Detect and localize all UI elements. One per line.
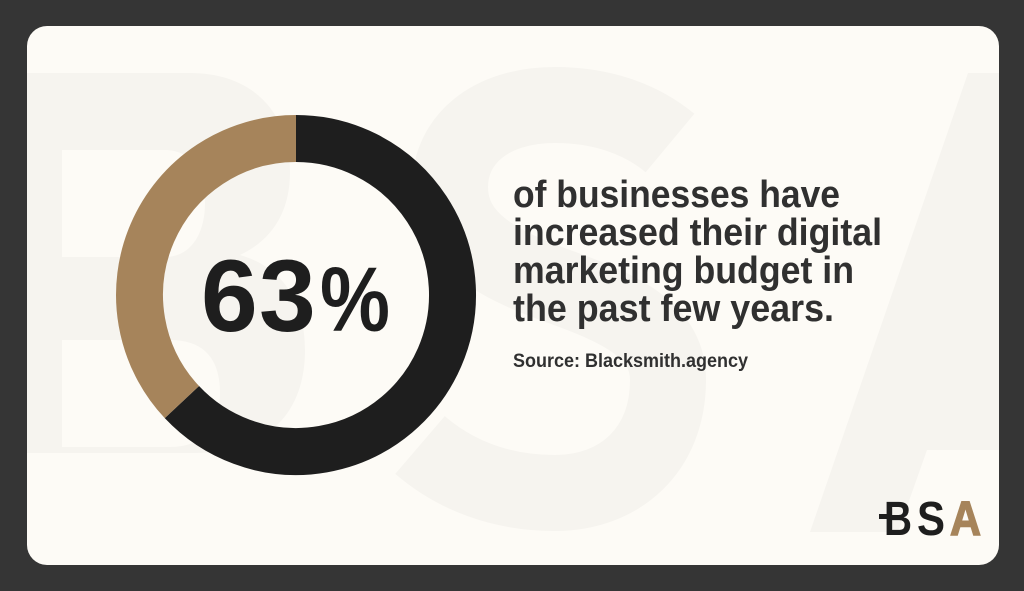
text block: description [513, 174, 882, 330]
text block: description: of businesses have [513, 174, 840, 216]
donut chart [140, 138, 453, 452]
logo: BSA [879, 493, 981, 546]
segment: 37% tan [140, 138, 296, 402]
text block: description: increased their digital [513, 212, 882, 254]
source note: Source: Blacksmith.agency [513, 350, 748, 372]
stat: 63% [201, 239, 390, 353]
text block: description: the past few years. [513, 288, 834, 330]
logo: BSA: A [950, 493, 981, 546]
logo: BSA: S [917, 493, 945, 546]
stat: 63%: 63 [201, 239, 316, 353]
stat: 63%: % [320, 249, 390, 351]
text block: description: marketing budget in [513, 250, 854, 292]
logo: BSA: B [884, 493, 912, 546]
watermark: BSA letters [20, 73, 999, 532]
segment: 63% dark [182, 138, 453, 452]
